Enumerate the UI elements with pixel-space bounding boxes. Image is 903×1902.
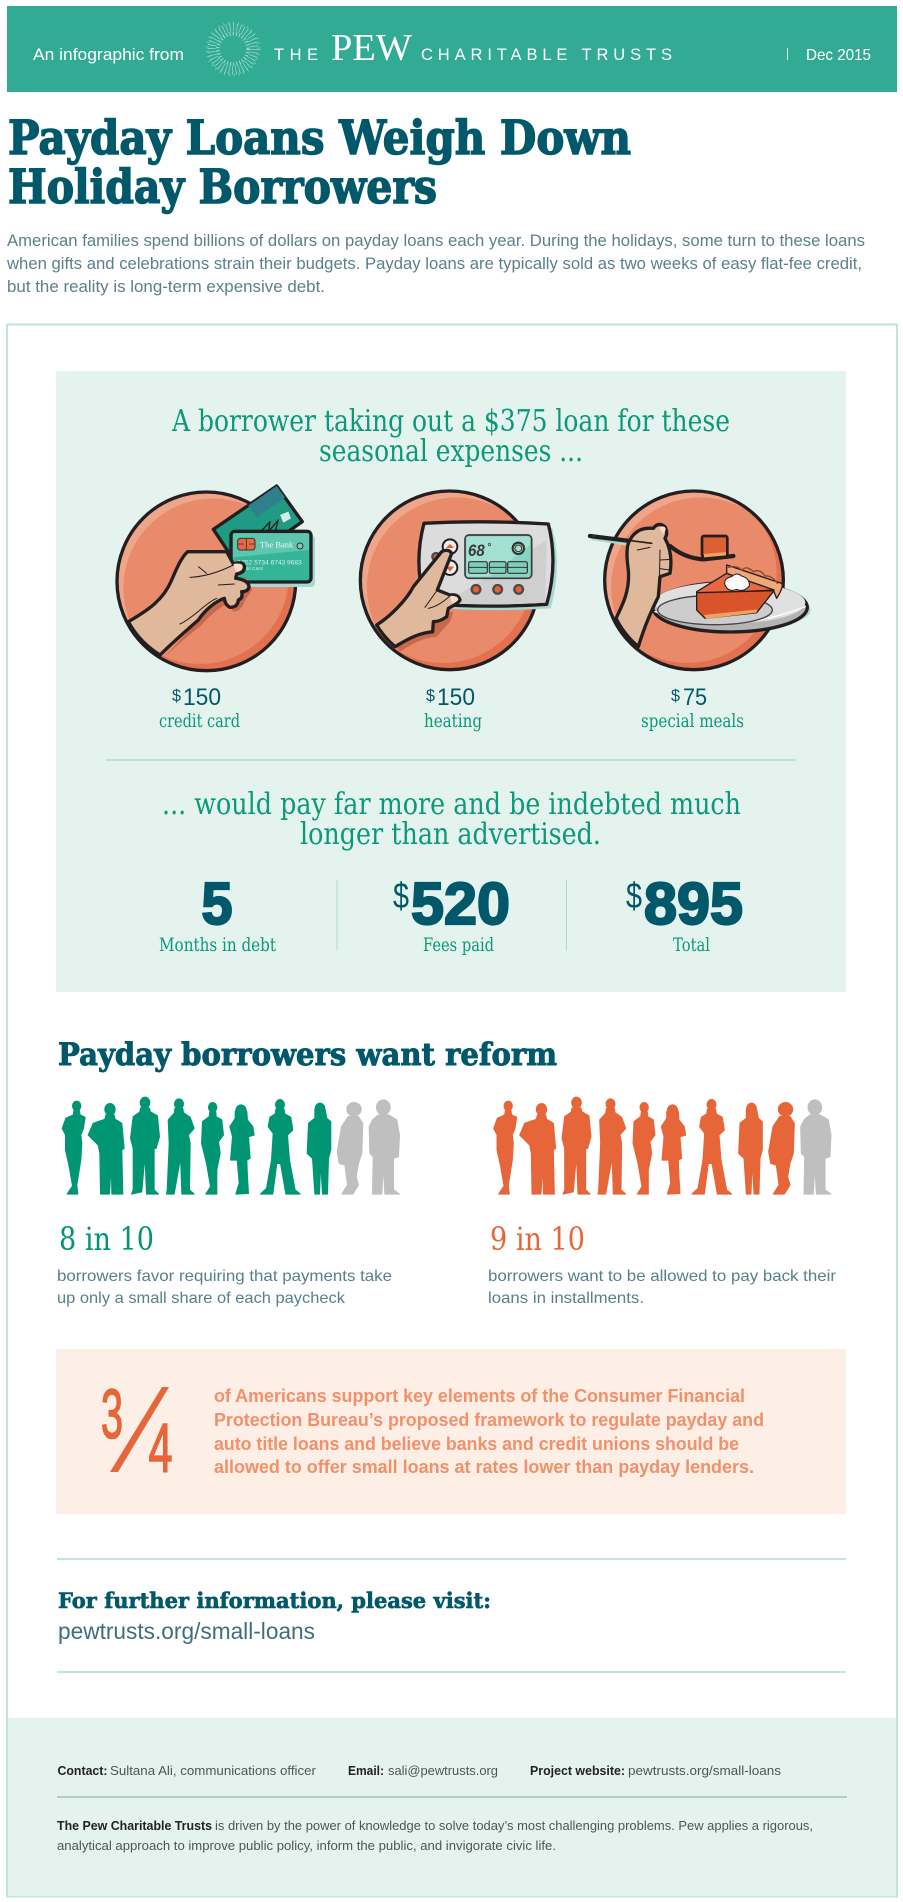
label: special meals cost bbox=[641, 684, 744, 732]
intro text: American families spend billions of dollars on payday loans each year. During the holidays, some turn to these loans bbox=[7, 232, 865, 250]
stat: months in debt: Months in debt bbox=[159, 935, 276, 956]
callout text: Protection Bureau’s proposed framework to regulate payday and bbox=[214, 1410, 764, 1430]
title: Payday Loans Weigh Down bbox=[8, 111, 631, 166]
contact row: pewtrusts.org/small-loans bbox=[628, 1763, 782, 1778]
icon: hand holding credit cards: The Bank bbox=[260, 540, 293, 549]
stat: months in debt bbox=[159, 871, 276, 956]
intro text: but the reality is long-term expensive debt. bbox=[7, 278, 325, 296]
label: heating cost: 150 bbox=[437, 684, 475, 711]
heading: indebted longer: longer than advertised. bbox=[300, 817, 601, 851]
stat: fees paid bbox=[393, 871, 510, 956]
stat text: 8 in 10: up only a small share of each paycheck bbox=[57, 1290, 346, 1307]
stat: fees paid: $ bbox=[393, 875, 409, 916]
callout text: allowed to offer small loans at rates lower than payday lenders. bbox=[214, 1457, 754, 1477]
stat: fees paid: Fees paid bbox=[423, 935, 494, 956]
further information: pewtrusts.org/small-loans bbox=[58, 1618, 315, 1644]
stat text: 9 in 10: loans in installments. bbox=[488, 1290, 644, 1307]
label: special meals cost: 75 bbox=[683, 684, 707, 711]
icon: finger on thermostat: ° bbox=[487, 542, 491, 553]
header date: Dec 2015 bbox=[806, 47, 871, 64]
pictogram: 8 in 10 people bbox=[62, 1097, 399, 1194]
pictogram: 9 in 10 people bbox=[494, 1097, 831, 1194]
stat: total: $ bbox=[626, 875, 642, 916]
logo wordmark: THE bbox=[274, 46, 318, 64]
callout text bbox=[214, 1386, 764, 1477]
heading: indebted longer: ... would pay far more and be indebted much bbox=[162, 787, 741, 821]
label: special meals cost: $ bbox=[671, 686, 681, 705]
heading: seasonal expenses: seasonal expenses ... bbox=[319, 434, 583, 468]
label: heating cost bbox=[424, 684, 482, 732]
about text: analytical approach to improve public policy, inform the public, and invigorate civic life. bbox=[57, 1838, 556, 1853]
heading: payday borrowers want reform: Payday borrowers want reform bbox=[58, 1037, 557, 1073]
contact row: Email: bbox=[348, 1763, 384, 1778]
logo wordmark: PEW bbox=[331, 27, 412, 69]
icon: hand holding credit cards: 1752 5734 6743 9683 bbox=[238, 560, 302, 566]
further information: For further information, please visit: bbox=[58, 1588, 491, 1613]
icon: hand holding credit cards bbox=[110, 485, 315, 677]
icon: hand holding credit cards: Credit Card bbox=[238, 566, 263, 572]
heading: indebted longer bbox=[162, 787, 741, 851]
fraction: 3/4: 4 bbox=[148, 1409, 172, 1487]
icon: finger on thermostat bbox=[354, 484, 557, 676]
stat: months in debt: 5 bbox=[202, 871, 232, 937]
heading: seasonal expenses bbox=[171, 404, 730, 468]
heading: seasonal expenses: A borrower taking out a $375 loan for these bbox=[171, 404, 730, 438]
stat: total: 895 bbox=[644, 871, 743, 937]
contact row: Project website: bbox=[530, 1763, 625, 1778]
label: heating cost: heating bbox=[424, 711, 482, 732]
about text bbox=[57, 1818, 813, 1853]
label: credit card cost: 150 bbox=[183, 684, 221, 711]
label: credit card cost: $ bbox=[172, 686, 182, 705]
label: credit card cost bbox=[159, 684, 240, 732]
icon: finger on thermostat: 68 bbox=[468, 541, 485, 560]
further information bbox=[58, 1588, 491, 1644]
title: Holiday Borrowers bbox=[8, 160, 437, 215]
stat text: 8 in 10 bbox=[57, 1220, 392, 1307]
contact row bbox=[58, 1763, 782, 1778]
icon: hand with fork and pie bbox=[590, 484, 811, 676]
label: special meals cost: special meals bbox=[641, 711, 744, 732]
panel: three-quarters callout bbox=[56, 1349, 846, 1514]
logo wordmark bbox=[274, 27, 672, 69]
intro text bbox=[6, 232, 865, 296]
about text: is driven by the power of knowledge to solve today’s most challenging problems. Pew applies a rigorous, bbox=[215, 1818, 813, 1833]
stat: fees paid: 520 bbox=[411, 871, 510, 937]
about text: The Pew Charitable Trusts bbox=[57, 1818, 212, 1833]
title bbox=[8, 111, 631, 215]
fraction: 3/4 bbox=[101, 1375, 172, 1487]
contact row: sali@pewtrusts.org bbox=[388, 1763, 498, 1778]
icon: Pew sunburst logo bbox=[207, 23, 259, 75]
stat text: 9 in 10 bbox=[488, 1220, 837, 1307]
logo wordmark: CHARITABLE TRUSTS bbox=[421, 46, 672, 64]
stat text: 8 in 10: 8 in 10 bbox=[59, 1220, 154, 1258]
contact row: Sultana Ali, communications officer bbox=[110, 1763, 317, 1778]
panel: footer bbox=[8, 1718, 896, 1896]
fraction: 3/4: 3 bbox=[101, 1375, 123, 1453]
header credit text: An infographic from bbox=[33, 45, 184, 64]
stat text: 9 in 10: 9 in 10 bbox=[490, 1220, 585, 1258]
callout text: auto title loans and believe banks and credit unions should be bbox=[214, 1434, 739, 1454]
contact row: Contact: bbox=[58, 1763, 108, 1778]
label: heating cost: $ bbox=[426, 686, 436, 705]
header banner bbox=[7, 6, 897, 92]
intro text: when gifts and celebrations strain their budgets. Payday loans are typically sold as two weeks of easy flat-fee credit, bbox=[6, 255, 862, 273]
label: credit card cost: credit card bbox=[159, 711, 240, 732]
stat text: 8 in 10: borrowers favor requiring that payments take bbox=[57, 1268, 392, 1285]
panel: loan costs bbox=[56, 371, 846, 992]
callout text: of Americans support key elements of the Consumer Financial bbox=[214, 1386, 745, 1406]
stat: total bbox=[626, 871, 743, 956]
stat text: 9 in 10: borrowers want to be allowed to pay back their bbox=[488, 1268, 837, 1285]
stat: total: Total bbox=[673, 935, 710, 956]
